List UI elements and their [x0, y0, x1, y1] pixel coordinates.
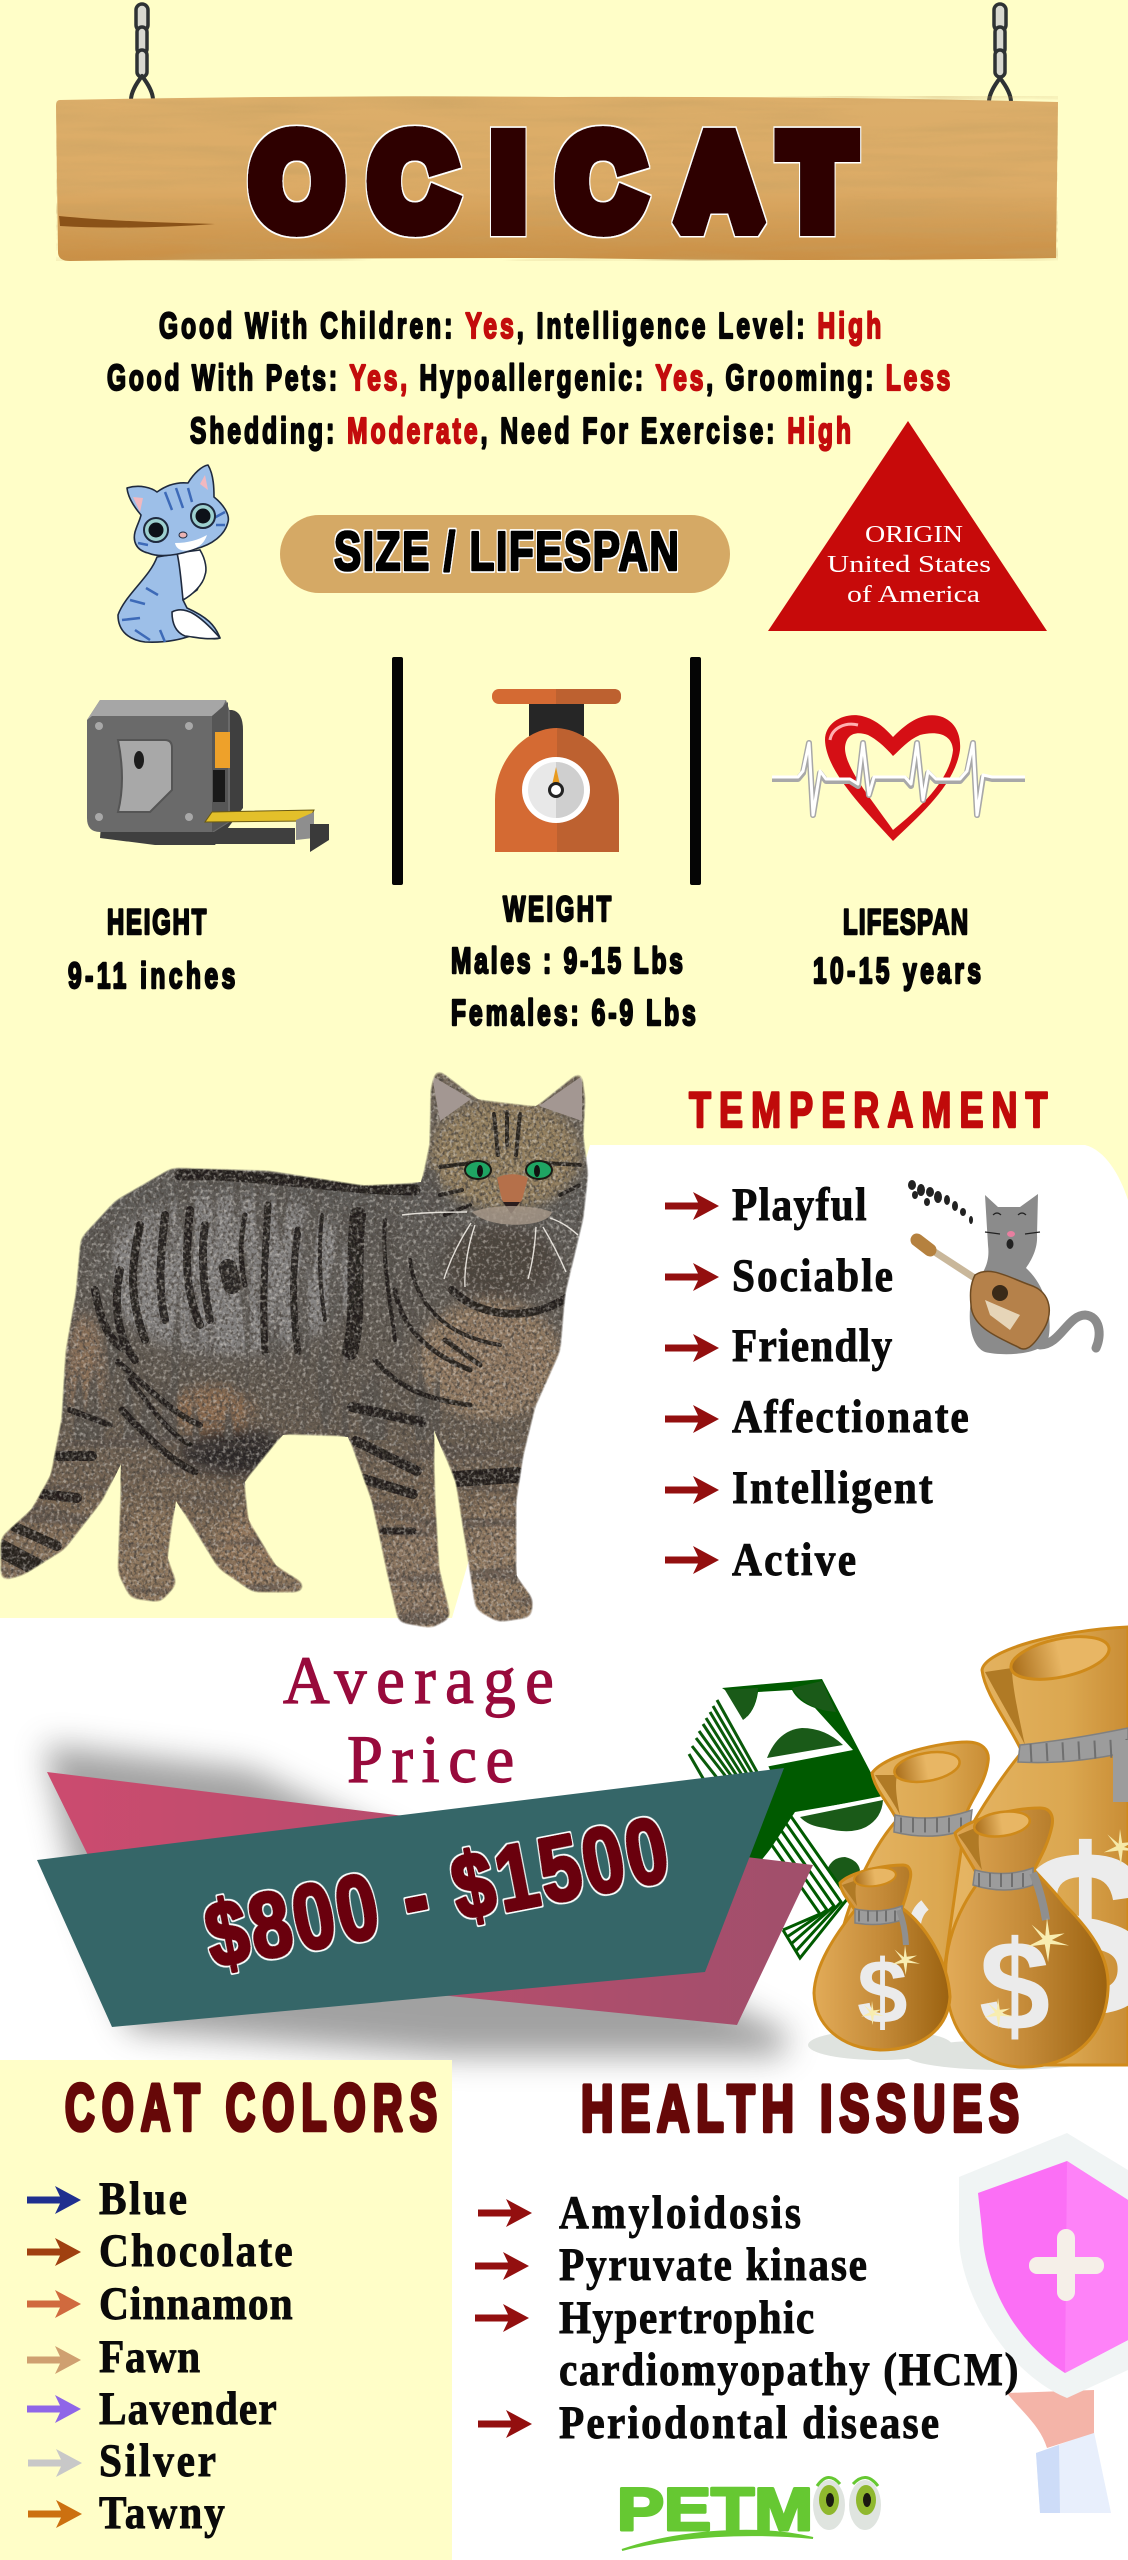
list: health issues: Amyloidosis	[559, 2187, 801, 2239]
logo: petmoo: PETM	[617, 2476, 813, 2543]
text block: weight: Males : 9-15 Lbs	[451, 940, 683, 981]
list: color names: Silver	[99, 2435, 216, 2487]
text block: traits line 2: Good With Pets: Yes, Hypoallergenic: Yes, Grooming: Less	[107, 357, 950, 398]
text block: height: 9-11 inches	[68, 955, 235, 996]
list: health issues	[475, 2187, 1018, 2449]
callout: origin triangle: United States	[827, 552, 991, 578]
text block: height: HEIGHT	[107, 904, 206, 942]
icon: heart with heartbeat line	[772, 715, 1025, 841]
cat stripes	[0, 1112, 580, 1568]
icon: tape measure	[87, 700, 329, 852]
list: health issues: Hypertrophic	[559, 2292, 814, 2344]
callout: origin triangle: of America	[847, 582, 980, 608]
icon: music notes	[908, 1180, 973, 1224]
heading pill: size / lifespan: SIZE / LIFESPAN	[334, 521, 679, 583]
icon: right hanging chain	[989, 4, 1011, 102]
list: temperament traits: Sociable	[732, 1250, 893, 1302]
illustration: tabby cat photo	[0, 1060, 590, 1630]
list: color names: Lavender	[99, 2383, 277, 2435]
icon: small money bag	[814, 1865, 950, 2050]
icon: large money bag	[930, 1627, 1128, 2068]
list: temperament traits: Playful	[732, 1179, 867, 1231]
panel: wood sign title board	[56, 96, 1058, 261]
heading: coat colors: COAT COLORS	[65, 2070, 437, 2144]
text block: traits line 1: Good With Children: Yes, Intelligence Level: High	[159, 305, 881, 346]
text block: weight: Females: 6-9 Lbs	[451, 992, 696, 1033]
heading pill: size / lifespan	[280, 515, 730, 593]
list: color names: Blue	[99, 2173, 187, 2225]
heading: average price: Price	[347, 1723, 514, 1797]
icon: logo eyes	[813, 2477, 881, 2530]
list: temperament traits	[665, 1179, 969, 1586]
text block: lifespan: LIFESPAN	[843, 904, 968, 942]
illustration: hand holding health shield	[959, 2133, 1128, 2513]
text block: height	[68, 904, 235, 996]
text block: traits line 3: Shedding: Moderate, Need For Exercise: High	[190, 410, 851, 451]
icon: hand	[1007, 2390, 1094, 2448]
callout: origin triangle: ORIGIN	[865, 522, 963, 548]
banner: price ribbon	[37, 1745, 813, 2056]
icon: medium money bag	[834, 1742, 988, 2000]
list: color names: Cinnamon	[99, 2278, 293, 2330]
banner shadow	[45, 1745, 790, 2056]
callout: origin triangle	[768, 421, 1047, 631]
icon: front money bag: $	[979, 1915, 1050, 2058]
list: color names: Chocolate	[99, 2225, 293, 2277]
heading: health issues: HEALTH ISSUES	[581, 2071, 1019, 2145]
icon: small money bag: $	[857, 1942, 908, 2043]
icon: left hanging chain	[131, 4, 153, 100]
text block: lifespan	[813, 904, 981, 991]
icon: orange kitchen scale	[492, 689, 621, 852]
list: health issues: Periodontal disease	[559, 2397, 939, 2449]
icon: shield	[959, 2133, 1128, 2398]
list: health issues: Pyruvate kinase	[559, 2239, 867, 2291]
list: color names: Tawny	[99, 2487, 225, 2539]
list: color names: Fawn	[99, 2331, 200, 2383]
illustration: money bags	[808, 1627, 1128, 2070]
list: temperament traits: Friendly	[732, 1320, 892, 1372]
icon: sleeve	[1036, 2432, 1111, 2513]
cat shading patches	[67, 1100, 580, 1622]
logo: petmoo	[617, 2476, 881, 2550]
text block: lifespan: 10-15 years	[813, 950, 981, 991]
list: color names	[27, 2173, 293, 2539]
price text: $800 - $1500	[197, 1797, 676, 1988]
list: temperament traits: Active	[732, 1534, 856, 1586]
text block: weight	[451, 891, 696, 1033]
icon: grey cat playing guitar	[908, 1180, 1099, 1354]
icon: blue cartoon kitten	[118, 465, 228, 642]
list: temperament traits: Intelligent	[732, 1462, 933, 1514]
panel: white temperament backdrop	[0, 1145, 1128, 2560]
panel: coat colors	[0, 2060, 452, 2560]
heading: temperament: TEMPERAMENT	[689, 1083, 1048, 1138]
list: temperament traits: Affectionate	[732, 1391, 969, 1443]
text block: weight: WEIGHT	[503, 891, 611, 929]
list: health issues: cardiomyopathy (HCM)	[559, 2344, 1018, 2396]
divider left	[392, 657, 403, 885]
title: OCICAT	[252, 110, 852, 253]
icon: stack of dollar bills	[688, 1679, 883, 1958]
divider right	[690, 657, 701, 885]
icon: front money bag	[946, 1808, 1108, 2067]
heading: average price: Average	[283, 1644, 554, 1718]
heading: average price	[283, 1644, 554, 1797]
